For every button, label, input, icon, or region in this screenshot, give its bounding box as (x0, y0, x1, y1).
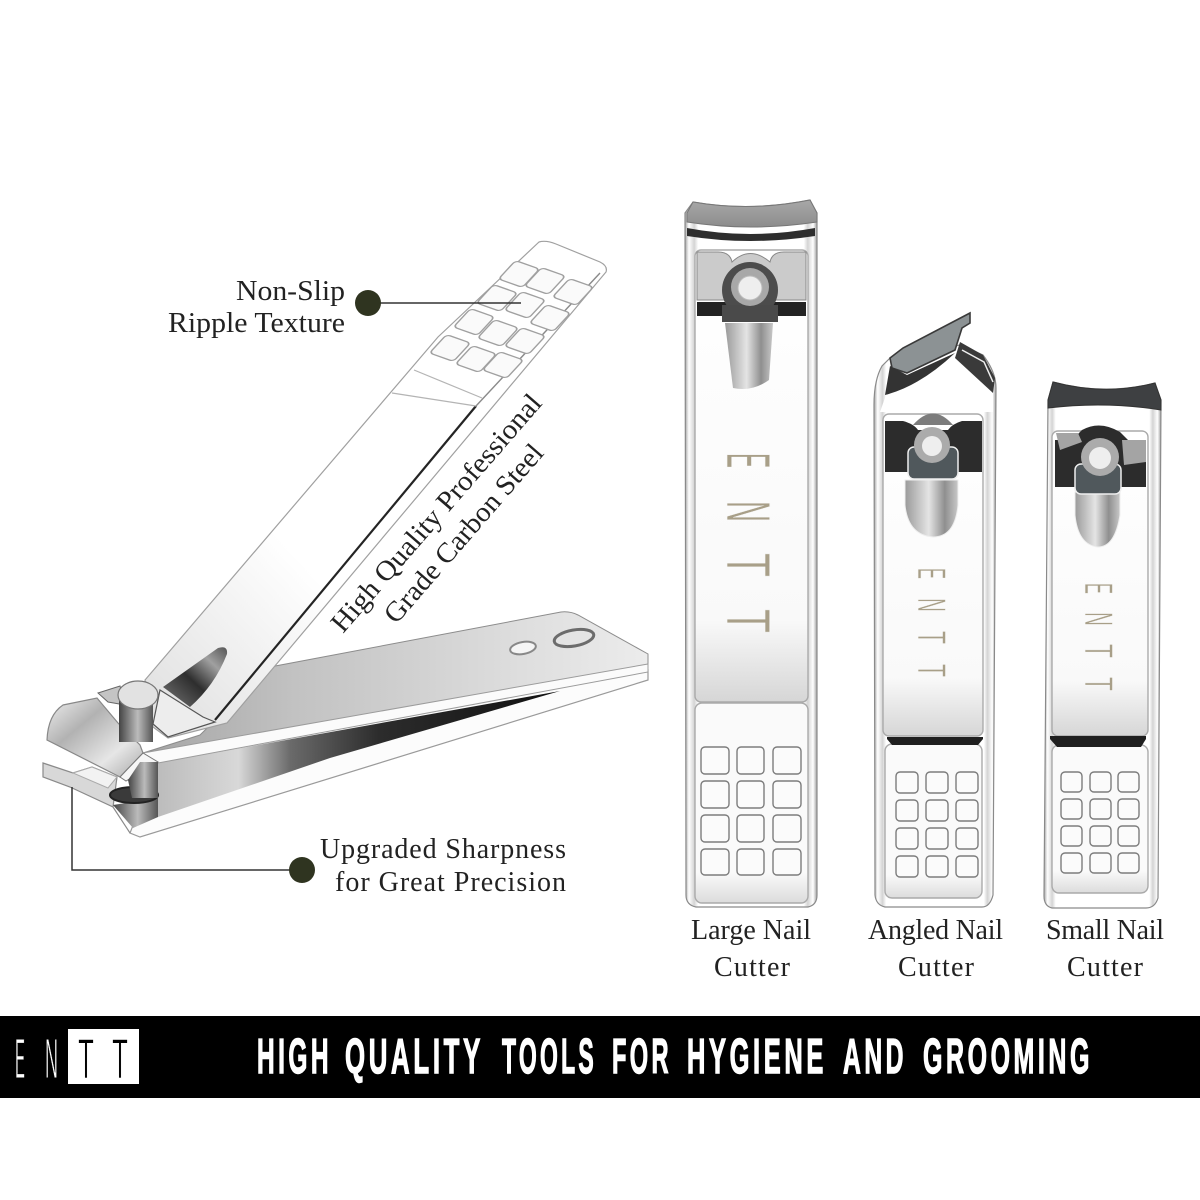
body (685, 200, 817, 907)
callout text (320, 834, 566, 898)
marker dot (289, 857, 315, 883)
pivot post (128, 762, 158, 798)
top lip (1048, 382, 1161, 410)
lower inner panel (1052, 745, 1148, 893)
label: large nail cutter: Cutter (714, 952, 791, 983)
post base (113, 798, 158, 828)
banner title: AND (843, 1030, 907, 1084)
pivot head (118, 681, 158, 709)
back wing (98, 686, 125, 705)
banner title: HIGH (257, 1030, 332, 1084)
engraved brand: T (1076, 644, 1120, 658)
dark band (697, 302, 806, 316)
banner background (0, 1016, 1200, 1098)
engraved brand: E (1076, 583, 1120, 594)
footer banner (0, 1016, 1200, 1098)
engraved brand: E (713, 453, 782, 468)
callout text: Ripple Texture (168, 308, 345, 339)
brand logo: E (15, 1027, 25, 1091)
upper inner panel (1052, 431, 1148, 736)
upper inner panel (695, 250, 808, 702)
large nail cutter (685, 200, 817, 907)
engraved brand (1076, 583, 1120, 691)
panel divider (887, 737, 983, 745)
lip shadow (687, 228, 815, 241)
brand logo (15, 1027, 139, 1091)
upper jaw (47, 698, 143, 777)
jaw rim (120, 753, 158, 781)
marker dot (355, 290, 381, 316)
callout text: Non-Slip (236, 276, 345, 307)
engraved brand (713, 453, 782, 633)
banner title: TOOLS (502, 1030, 597, 1084)
white rim of upper plate (143, 664, 648, 763)
engraved brand: T (909, 664, 953, 677)
tongue (725, 323, 773, 389)
pivot shaft (119, 700, 153, 742)
lever holes (509, 627, 595, 656)
engraved brand: T (713, 553, 782, 577)
brand logo: T (78, 1027, 94, 1091)
lever foot wing (153, 690, 215, 737)
lever facet lines (392, 370, 482, 406)
blade shadow (885, 353, 955, 395)
panel divider (1050, 736, 1146, 747)
callout text: Upgraded Sharpness (320, 834, 566, 865)
shaded underside wedge (158, 691, 560, 817)
window highlights (1056, 433, 1146, 465)
banner title: HYGIENE (687, 1030, 827, 1084)
pivot (722, 262, 778, 322)
engraved brand: N (713, 501, 782, 522)
pivot ring (110, 787, 158, 803)
label: large nail cutter: Large Nail (691, 915, 811, 946)
angled nail cutter (874, 313, 996, 907)
lower inner panel (695, 703, 808, 903)
body (1044, 382, 1161, 908)
banner title (257, 1030, 1093, 1084)
body (874, 345, 996, 907)
lower lever base (130, 670, 648, 837)
angled blade (890, 313, 970, 373)
ripple texture (430, 261, 594, 378)
callout text: for Great Precision (335, 867, 566, 898)
engraved brand (909, 568, 953, 677)
callout: upgraded sharpness (72, 787, 566, 898)
callout: carbon steel: High Quality Professional (325, 388, 549, 639)
right shoulder shadow (955, 342, 995, 393)
upper plate of lower lever (143, 612, 648, 753)
body head white (880, 357, 993, 412)
lever shadow edge (215, 406, 476, 720)
leader line (370, 302, 521, 304)
lower inner panel (885, 744, 982, 898)
label: small nail cutter: Cutter (1067, 952, 1144, 983)
hinge window (885, 421, 982, 472)
lower jaw (43, 763, 130, 833)
lower jaw bed (73, 767, 117, 788)
lever upper edge (476, 273, 600, 406)
top lip (687, 200, 817, 227)
callout text (168, 276, 345, 339)
engraved brand: T (1076, 677, 1120, 691)
banner title: QUALITY (345, 1030, 484, 1084)
pivot (1075, 438, 1121, 494)
callout: carbon steel: Grade Carbon Steel (378, 438, 550, 630)
engraved brand: T (713, 609, 782, 633)
banner title: FOR (612, 1030, 672, 1084)
pivot (908, 414, 958, 479)
grip tiles (701, 747, 801, 875)
engraved brand: N (909, 598, 953, 612)
small nail cutter (1044, 382, 1161, 908)
hinge window (697, 252, 806, 300)
engraved brand: E (909, 568, 953, 579)
upper lever (145, 241, 606, 738)
nail clipper: open side view (43, 241, 648, 837)
pressure dome (163, 647, 227, 707)
callout: non-slip ripple texture (168, 276, 521, 339)
tongue (1075, 492, 1120, 547)
brand logo: T (112, 1027, 128, 1091)
label: angled nail cutter: Angled Nail (868, 915, 1003, 946)
upper inner panel (883, 414, 983, 736)
engraved brand: T (909, 631, 953, 644)
engraved brand: N (1076, 612, 1120, 626)
label: small nail cutter: Small Nail (1046, 915, 1164, 946)
grip tiles (896, 772, 978, 877)
grip tiles (1061, 772, 1139, 873)
label: angled nail cutter: Cutter (898, 952, 975, 983)
hinge window (1055, 425, 1146, 487)
label: angled nail cutter (868, 915, 1003, 983)
shoulder highlight (962, 350, 993, 382)
label: large nail cutter (691, 915, 811, 983)
leader line (72, 787, 300, 870)
brand logo: N (45, 1027, 58, 1091)
label: small nail cutter (1046, 915, 1164, 983)
tongue (905, 480, 958, 537)
